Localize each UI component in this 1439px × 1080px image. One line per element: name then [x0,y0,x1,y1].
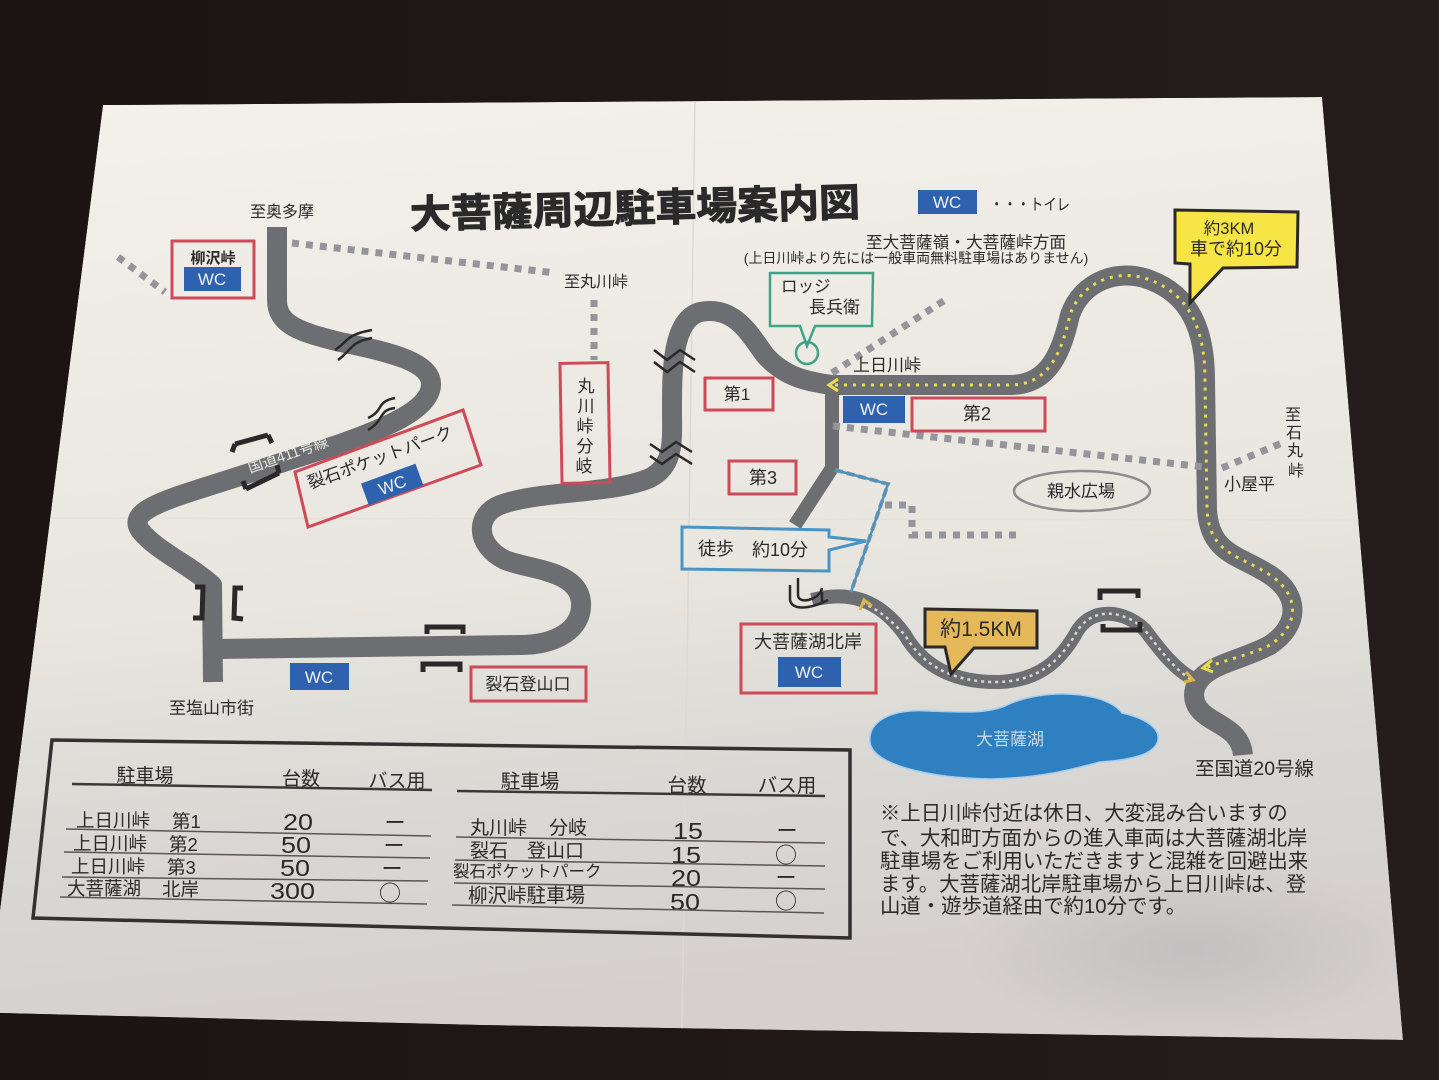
WC: road: WC [305,668,333,687]
label: Marukawa junction [560,363,610,483]
road network: west road [137,227,832,682]
label: Marukawa junction: 丸 [578,377,594,396]
right table rows: 20 [671,865,701,891]
left table rows: 20 [283,809,313,835]
callout: 3 km: 約3KM [1204,219,1254,238]
label: parking 2 [912,398,1045,431]
left table rows: 大菩薩湖 [67,878,141,899]
label: Okutama direction: 至奥多摩 [250,203,314,221]
left table rows: 上日川峠 [73,833,147,854]
label: parking 2: 第2 [963,404,991,424]
left table rows: ー [384,830,404,860]
label: Sakeishi trailhead [471,667,586,701]
callout: 1.5 km [925,609,1037,674]
left table rows: ー [382,853,402,883]
note: congestion advice: 山道・遊歩道経由で約10分です。 [880,895,1186,918]
left table rows [60,807,431,908]
right table headers: 台数 [667,775,707,797]
yellow arrowheads [829,379,1213,682]
callout: walking 10 min [682,527,866,571]
right table rows [452,815,825,916]
label: Daibosatsu lake north shore: 大菩薩湖北岸 [754,632,862,652]
label: Marukawa junction: 川 [578,397,594,416]
label: parking 1: 第1 [724,385,750,404]
label: Ishimaru pass direction [1285,407,1304,480]
left table headers: 台数 [282,768,320,790]
note: congestion advice: で、大和町方面からの進入車両は大菩薩湖北岸 [880,827,1307,850]
label: Sakeishi pocket park: WC [376,472,409,499]
WC: road [290,663,349,690]
right table rows: 登山口 [527,840,584,862]
label: Yanagisawa pass: WC [198,270,226,289]
label: parking 1 [705,378,773,410]
right table rows: 裂石ポケットパーク [453,862,602,881]
callout: 3 km [1175,210,1298,303]
legend: WC toilet [918,190,1070,214]
right table headers [457,771,825,797]
label: parking 3: 第3 [749,468,777,488]
right table rows: ○ [775,838,797,870]
label: Ishimaru pass direction: 丸 [1287,442,1303,460]
label: Sakeishi trailhead: 裂石登山口 [486,675,570,694]
left table rows: 50 [281,832,311,858]
label: Marukawa junction: 岐 [576,457,592,476]
left table headers: バス用 [368,771,426,792]
note: upper direction [744,233,1088,266]
left table rows: 第1 [172,811,201,832]
note: congestion advice: ます。大菩薩湖北岸駐車場から上日川峠は、登 [880,873,1306,896]
note: congestion advice [880,802,1308,918]
right table headers: 駐車場 [501,771,559,793]
callout: walking 10 min: 徒歩 [698,539,734,559]
legend: WC toilet: WC [933,193,961,212]
label: lodge Chobei: 長兵衛 [809,298,860,317]
label: Sakeishi pocket park [295,410,481,527]
left table rows: ー [384,807,406,837]
label: Marukawa junction: 分 [576,437,594,456]
lake: 大菩薩湖 [976,730,1044,749]
left table rows: 300 [270,878,315,904]
walking trail [835,470,888,592]
label: Shiozan city direction: 至塩山市街 [169,699,254,718]
right table rows: ー [776,862,796,892]
callout: walking 10 min: 約10分 [752,540,808,560]
label: Shinsui plaza [1014,471,1150,511]
right table rows: 分岐 [549,817,587,839]
label: Daibosatsu lake north shore [741,624,876,693]
left table headers [72,765,432,792]
label: Koyadaira: 小屋平 [1224,475,1275,494]
label: Yanagisawa pass: 柳沢峠 [190,249,236,267]
road: lake north shore [812,596,1195,682]
left table rows: 50 [280,855,310,881]
right table rows: 柳沢峠駐車場 [468,885,585,907]
note: upper direction: (上日川峠より先には一般車両無料駐車場はありません) [744,250,1088,266]
right table rows: 15 [671,842,701,868]
left table rows: 第2 [169,834,198,855]
callout: 1.5 km: 約1.5KM [940,618,1022,641]
lake [870,694,1158,779]
left table rows: 第3 [167,857,196,878]
road break marks [335,330,828,608]
right table rows: 15 [673,818,703,844]
label: parking 3 [729,461,796,494]
left table rows: 上日川峠 [76,810,150,831]
label: Ishimaru pass direction: 峠 [1288,462,1304,480]
white dotted route [862,603,1192,682]
yellow dotted route [835,275,1292,668]
label: Ishimaru pass direction: 至 [1285,407,1301,424]
label: Sakeishi pocket park: 裂石ポケットパーク [305,423,455,493]
legend: WC toilet: ・・・トイレ [990,197,1070,214]
note: congestion advice: ※上日川峠付近は休日、大変混み合いますの [880,802,1288,825]
right table rows: 丸川峠 [470,817,527,839]
label: lodge Chobei: ロッジ [781,278,830,296]
left table rows: 北岸 [162,879,199,900]
label: Route 20 direction: 至国道20号線 [1195,758,1314,780]
title: 大菩薩周辺駐車場案内図 [409,182,860,237]
WC: Kamihikawa: WC [860,400,888,419]
bridge marks [193,435,1140,672]
label: Shinsui plaza: 親水広場 [1047,482,1115,501]
note: congestion advice: 駐車場をご利用いただきますと混雑を回避出来 [880,850,1308,873]
note: upper direction: 至大菩薩嶺・大菩薩峠方面 [866,233,1066,252]
left table rows: ○ [379,876,401,908]
right table rows: 裂石 [470,840,508,862]
label: Yanagisawa pass [172,241,254,298]
label: Route 411: 国道411号線 [246,433,331,477]
label: Marukawa pass direction: 至丸川峠 [564,273,628,291]
label: Marukawa junction: 峠 [576,417,594,436]
label: Daibosatsu lake north shore: WC [795,663,823,682]
left table headers: 駐車場 [116,765,174,787]
label: lodge Chobei [770,273,873,364]
label: Ishimaru pass direction: 石 [1286,425,1302,442]
callout: 3 km: 車で約10分 [1190,239,1282,259]
road network: kamihikawa pass to highway [795,275,1292,755]
dotted trails [118,243,1282,535]
label: Kamihikawa pass: 上日川峠 [853,356,921,375]
WC: Kamihikawa [843,396,905,423]
right table headers: バス用 [758,775,816,797]
right table rows: 50 [670,889,700,915]
left table rows: 上日川峠 [71,856,145,877]
right table rows: ○ [775,884,797,916]
right table rows: ー [776,815,798,845]
table: parking capacity [33,740,850,938]
